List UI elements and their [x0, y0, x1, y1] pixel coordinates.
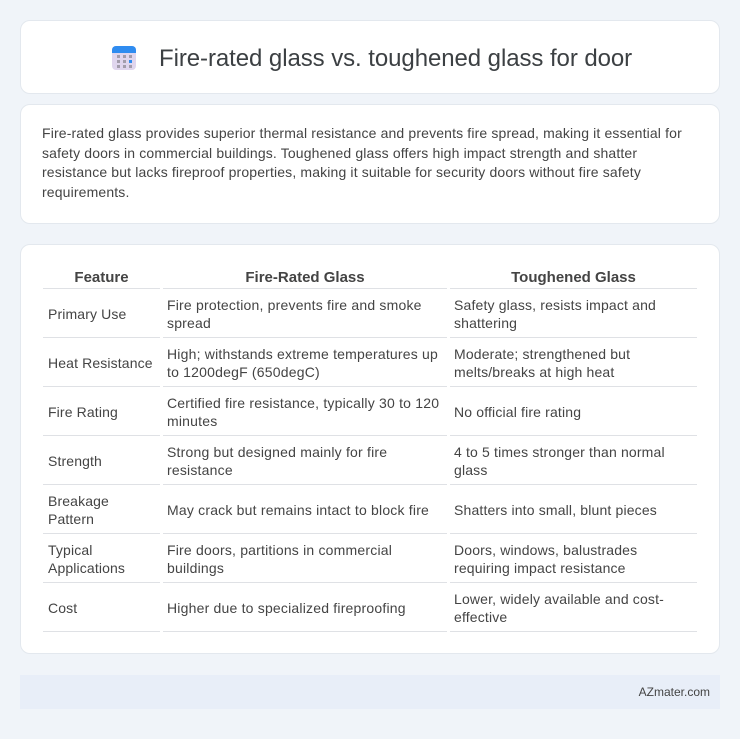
- panel: title card: [20, 20, 720, 94]
- fire-rated strength: resistance: [167, 462, 233, 478]
- toughened cost: effective: [454, 609, 507, 625]
- panel: comparison table: [20, 244, 720, 654]
- row: breakage pattern: Breakage: [48, 493, 109, 509]
- fire-rated primary use: spread: [167, 315, 211, 331]
- toughened typical applications: requiring impact resistance: [454, 560, 626, 576]
- row: primary use: Primary Use: [48, 306, 126, 322]
- fire-rated fire rating: Certified fire resistance, typically 30 to 120: [167, 395, 439, 411]
- table header: toughened glass: Toughened Glass: [511, 269, 636, 286]
- intro text: requirements.: [42, 184, 130, 200]
- table header: fire-rated glass: Fire-Rated Glass: [245, 269, 365, 286]
- toughened heat resistance: melts/breaks at high heat: [454, 364, 614, 380]
- toughened heat resistance: Moderate; strengthened but: [454, 346, 630, 362]
- table header: feature: Feature: [74, 269, 129, 286]
- intro text: resistance but lacks fireproof properties, making it suitable for security doors without fire safety: [42, 164, 641, 180]
- row: typical applications: [48, 542, 125, 576]
- fire-rated heat resistance: [167, 346, 438, 380]
- toughened primary use: Safety glass, resists impact and: [454, 297, 656, 313]
- footer bar: [20, 675, 720, 709]
- row: fire rating: Fire Rating: [48, 404, 118, 420]
- title: Fire-rated glass vs. toughened glass for door: [159, 45, 632, 72]
- toughened breakage pattern: Shatters into small, blunt pieces: [454, 502, 657, 518]
- fire-rated fire rating: [167, 395, 439, 429]
- intro text: Fire-rated glass provides superior thermal resistance and prevents fire spread, making it essential for: [42, 125, 682, 141]
- fire-rated primary use: Fire protection, prevents fire and smoke: [167, 297, 422, 313]
- footer credit: AZmater.com: [639, 685, 710, 699]
- intro text: [42, 125, 682, 200]
- fire-rated strength: Strong but designed mainly for fire: [167, 444, 387, 460]
- toughened cost: Lower, widely available and cost-: [454, 591, 664, 607]
- fire-rated cost: Higher due to specialized fireproofing: [167, 600, 406, 616]
- panel: introduction: [20, 104, 720, 224]
- fire-rated typical applications: buildings: [167, 560, 224, 576]
- toughened primary use: [454, 297, 656, 331]
- fire-rated breakage pattern: May crack but remains intact to block fire: [167, 502, 429, 518]
- row: heat resistance: Heat Resistance: [48, 355, 153, 371]
- row: breakage pattern: Pattern: [48, 511, 94, 527]
- toughened fire rating: No official fire rating: [454, 404, 581, 420]
- fire-rated fire rating: minutes: [167, 413, 217, 429]
- toughened typical applications: [454, 542, 637, 576]
- toughened heat resistance: [454, 346, 630, 380]
- row: typical applications: Typical: [48, 542, 92, 558]
- row: strength: Strength: [48, 453, 102, 469]
- fire-rated typical applications: [167, 542, 392, 576]
- fire-rated primary use: [167, 297, 422, 331]
- icon: calendar: [112, 46, 136, 70]
- row: breakage pattern: [48, 493, 109, 527]
- intro text: safety doors in commercial buildings. Toughened glass offers high impact strength and shatter: [42, 145, 637, 161]
- fire-rated strength: [167, 444, 387, 478]
- row: typical applications: Applications: [48, 560, 125, 576]
- fire-rated typical applications: Fire doors, partitions in commercial: [167, 542, 392, 558]
- fire-rated heat resistance: High; withstands extreme temperatures up: [167, 346, 438, 362]
- toughened strength: glass: [454, 462, 487, 478]
- row: cost: Cost: [48, 600, 77, 616]
- toughened typical applications: Doors, windows, balustrades: [454, 542, 637, 558]
- fire-rated heat resistance: to 1200degF (650degC): [167, 364, 320, 380]
- toughened strength: 4 to 5 times stronger than normal: [454, 444, 665, 460]
- toughened cost: [454, 591, 664, 625]
- toughened primary use: shattering: [454, 315, 517, 331]
- toughened strength: [454, 444, 665, 478]
